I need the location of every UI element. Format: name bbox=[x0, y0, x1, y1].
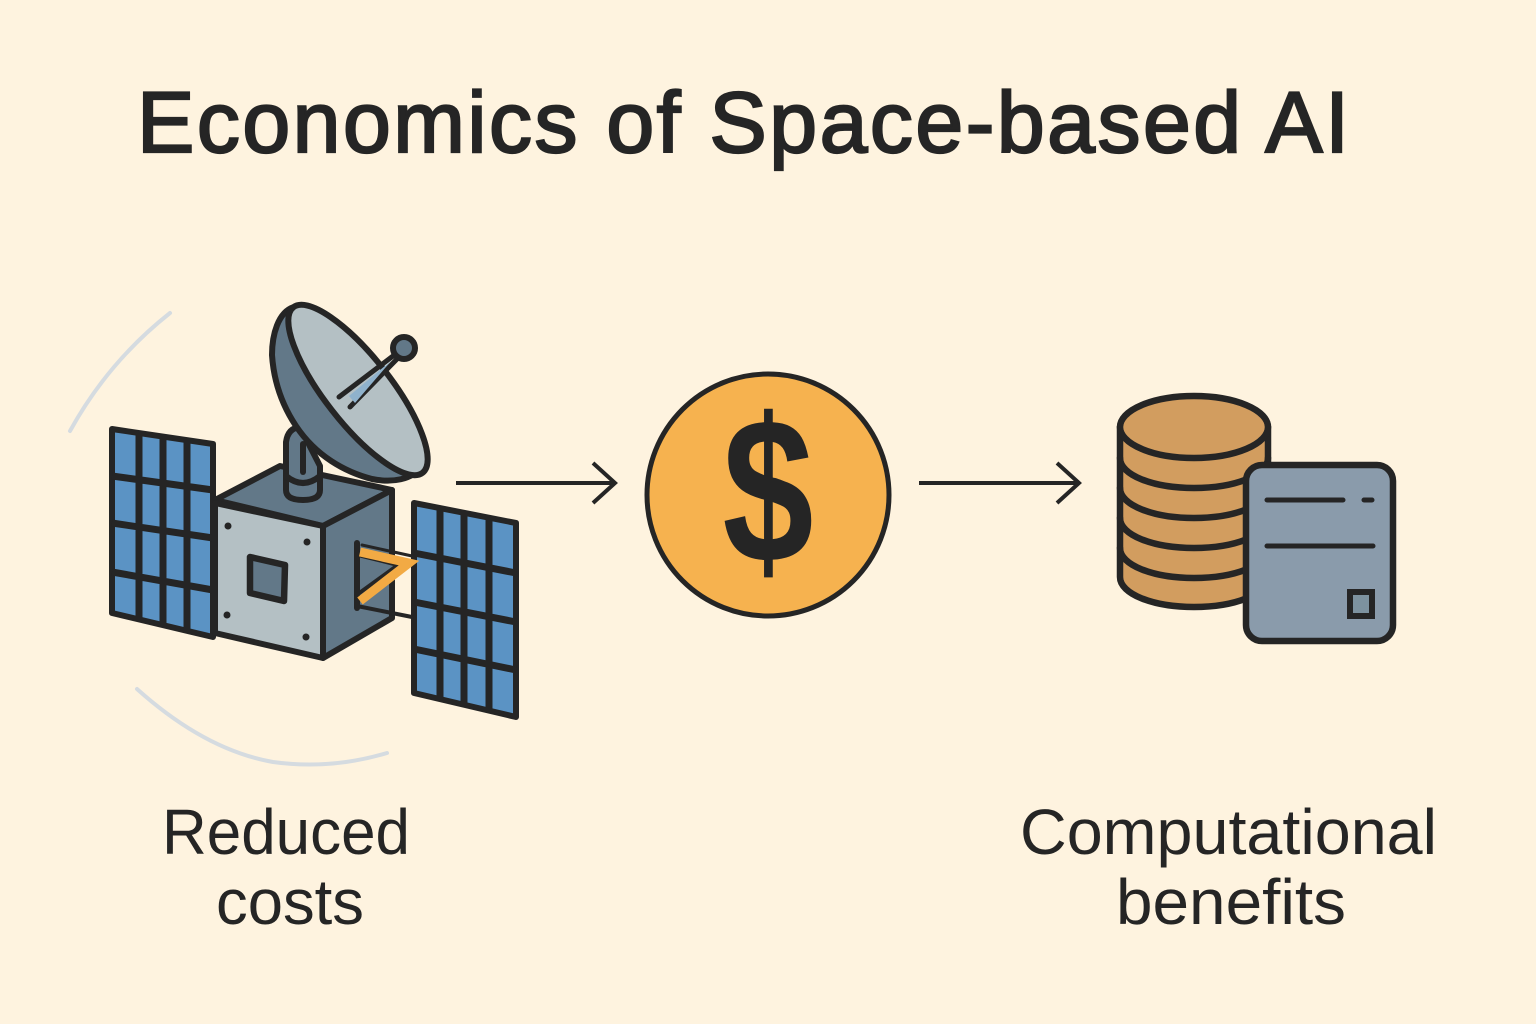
satellite body bbox=[215, 466, 392, 658]
dish mast bbox=[286, 427, 320, 500]
panel connector strut bbox=[357, 543, 412, 617]
label: reduced costs: costs bbox=[216, 866, 364, 938]
left solar panel bbox=[112, 429, 213, 637]
label: reduced costs: Reduced bbox=[162, 796, 410, 868]
dish feed bbox=[339, 337, 415, 407]
icon: satellite bbox=[70, 287, 516, 765]
icon: database and server bbox=[1120, 396, 1393, 641]
icon: dollar coin: $ bbox=[722, 376, 814, 606]
database stack bbox=[1120, 396, 1268, 607]
server panel bbox=[1246, 465, 1393, 641]
label: computational benefits: Computational bbox=[1020, 796, 1437, 868]
body window bbox=[250, 557, 285, 601]
icon: dollar coin bbox=[647, 374, 889, 616]
right solar panel bbox=[414, 503, 516, 717]
label: reduced costs bbox=[162, 796, 410, 938]
label: computational benefits: benefits bbox=[1116, 866, 1346, 938]
arrow: satellite to coin bbox=[456, 463, 615, 503]
orbit arcs bbox=[70, 313, 387, 765]
body screws bbox=[224, 522, 310, 640]
arrow: coin to database bbox=[919, 463, 1079, 503]
title: Economics of Space-based AI bbox=[137, 75, 1349, 171]
label: computational benefits bbox=[1020, 796, 1437, 938]
satellite dish bbox=[267, 287, 449, 493]
